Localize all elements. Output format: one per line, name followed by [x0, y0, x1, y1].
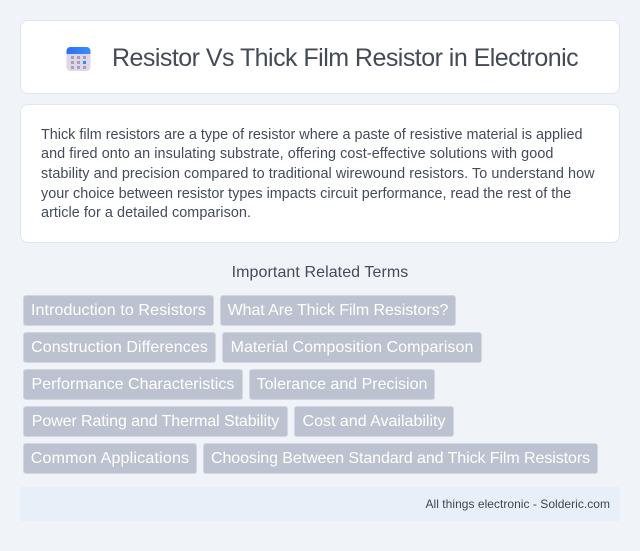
tag: Construction Differences: [31, 339, 208, 356]
tag: [23, 295, 214, 326]
tag: Performance Characteristics: [32, 376, 234, 393]
section heading: Important Related Terms: [232, 264, 408, 281]
footer bar: [20, 487, 620, 521]
tag: What Are Thick Film Resistors?: [228, 302, 448, 319]
tag: [203, 443, 598, 474]
intro text card: [20, 104, 620, 243]
tag: Material Composition Comparison: [231, 339, 473, 356]
tag: [23, 369, 243, 400]
intro paragraph: your choice between resistor types impacts circuit performance, read the rest of the: [41, 186, 571, 202]
icon: calendar: [66, 47, 90, 71]
tag: [23, 406, 288, 437]
tag: Common Applications: [31, 450, 189, 467]
intro paragraph: article for a detailed comparison.: [41, 205, 251, 221]
intro paragraph: stability and precision compared to traditional wirewound resistors. To understand how: [41, 166, 595, 182]
footer credit: All things electronic - Solderic.com: [426, 497, 610, 511]
tag: [294, 406, 454, 437]
tag: [23, 443, 197, 474]
header card: [20, 20, 620, 94]
tag: [23, 332, 216, 363]
intro paragraph: Thick film resistors are a type of resistor where a paste of resistive material is applied: [41, 127, 582, 143]
tag: Cost and Availability: [303, 413, 445, 430]
tag list: [23, 295, 598, 474]
tag: Choosing Between Standard and Thick Film Resistors: [211, 450, 590, 467]
tag: [220, 295, 456, 326]
intro paragraph: and fired onto an insulating substrate, offering cost-effective solutions with good: [41, 146, 553, 162]
tag: Power Rating and Thermal Stability: [32, 413, 279, 430]
tag: Tolerance and Precision: [257, 376, 427, 393]
intro paragraph: [41, 127, 595, 221]
tag: Introduction to Resistors: [31, 302, 206, 319]
tag: [222, 332, 482, 363]
tag: [249, 369, 435, 400]
title: Resistor Vs Thick Film Resistor in Electronic: [112, 44, 578, 72]
